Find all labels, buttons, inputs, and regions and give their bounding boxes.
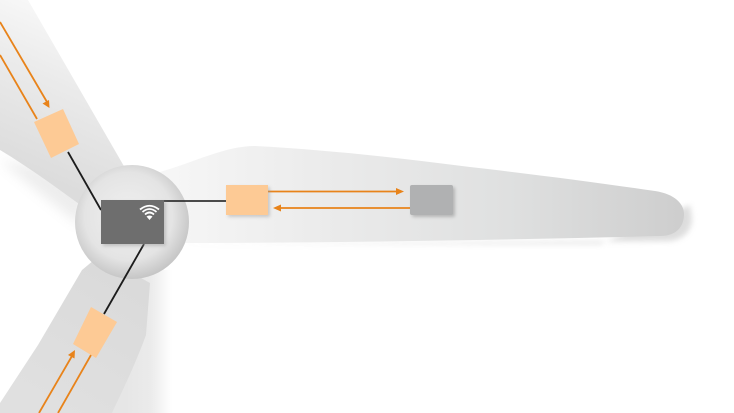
right blade bbox=[160, 146, 692, 244]
right sensor box bbox=[226, 185, 270, 217]
icon: wifi bbox=[140, 206, 159, 220]
lower signal arrows bbox=[39, 350, 91, 413]
upper sensor box bbox=[34, 109, 79, 158]
hub bbox=[75, 165, 189, 279]
lower sensor box bbox=[73, 307, 117, 358]
lower-left blade bbox=[0, 255, 172, 413]
grey blade-tip unit bbox=[410, 185, 455, 217]
cable: upper sensor to controller bbox=[68, 152, 101, 210]
right signal arrows bbox=[268, 188, 411, 212]
upper signal arrows bbox=[0, 22, 50, 119]
cable: lower sensor to controller bbox=[104, 244, 144, 314]
controller box bbox=[101, 200, 166, 246]
upper-left blade bbox=[0, 0, 125, 225]
cable: right sensor to controller bbox=[164, 200, 227, 202]
